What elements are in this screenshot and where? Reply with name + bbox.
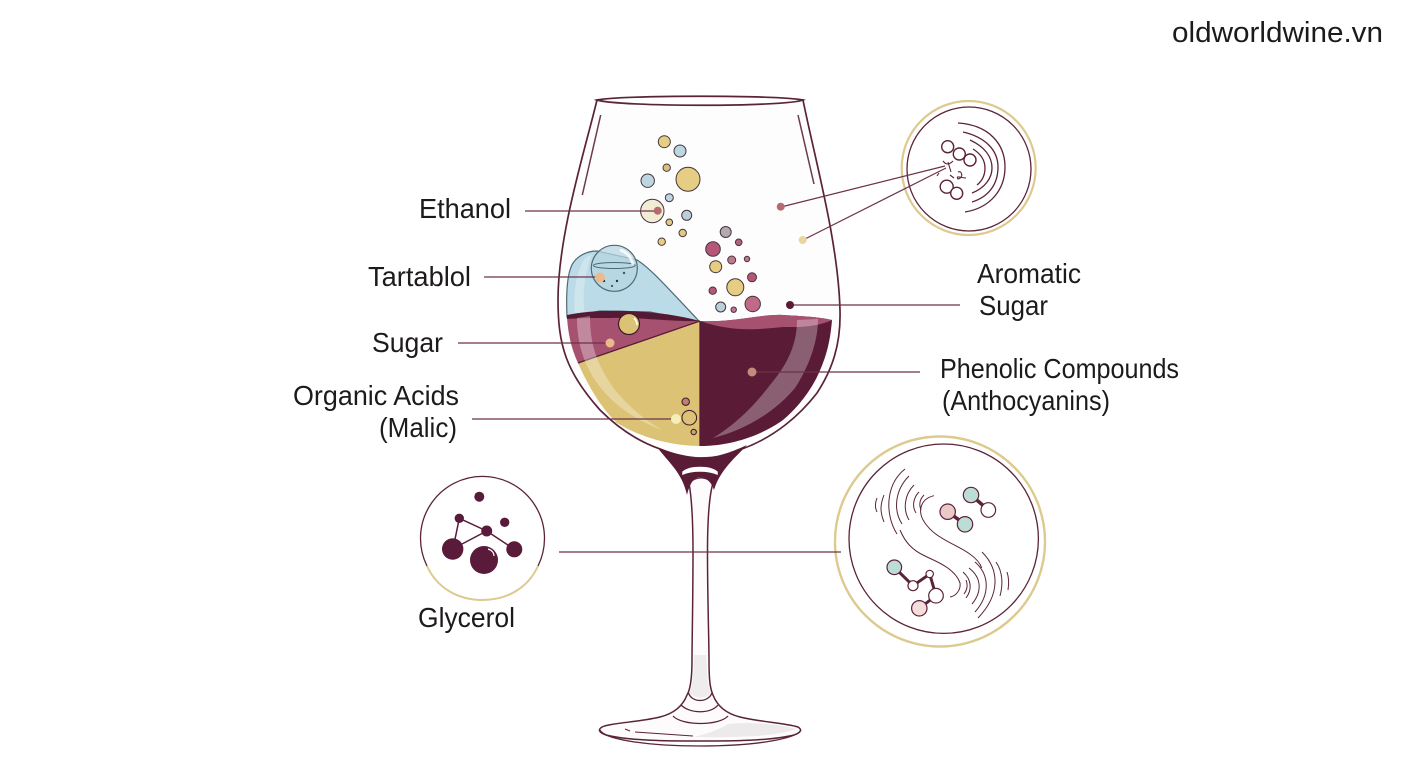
stem and foot — [599, 478, 801, 741]
glass neck — [657, 445, 747, 495]
callout: Phenolic Compounds (Anthocyanins): Phenolic Compounds — [940, 353, 1179, 384]
aroma arcs — [958, 123, 1005, 212]
callout: Phenolic Compounds (Anthocyanins) — [748, 353, 1179, 416]
callout: Ethanol — [419, 193, 662, 224]
stem shading — [690, 655, 711, 698]
callout: Tartablol: Tartablol — [368, 261, 471, 292]
flowing wave lines — [900, 496, 982, 597]
callout: Phenolic Compounds (Anthocyanins): (Anthocyanins) — [942, 385, 1110, 416]
aroma molecule circles — [940, 141, 976, 199]
molecule ring — [835, 436, 1045, 646]
glass rim — [597, 96, 803, 105]
dark wine wedge: phenolic section — [700, 315, 832, 446]
rose wine surface — [700, 315, 832, 329]
callout: Organic Acids (Malic): Organic Acids — [293, 380, 459, 411]
rising bubbles: lower cluster — [706, 226, 760, 312]
callout: Sugar — [372, 327, 614, 358]
right liquid highlight — [713, 319, 818, 438]
callout: Aromatic Sugar: Aromatic — [977, 258, 1081, 289]
yellow wedge: organic acids section — [578, 321, 700, 446]
aroma squiggles — [937, 161, 966, 179]
molecule detail circle — [835, 436, 1045, 646]
glycerol molecule atoms — [442, 492, 522, 574]
foot thickness line — [600, 730, 801, 746]
glass side reflections — [582, 115, 814, 195]
brand site name: oldworldwine.vn — [1172, 17, 1383, 49]
yellow bead on mauve wedge — [618, 314, 640, 334]
aroma pointer lines — [777, 166, 946, 244]
glycerol circle — [420, 476, 544, 600]
blue wedge: tartaric section — [567, 251, 700, 322]
foot reflections — [625, 729, 693, 736]
connector: glycerol to molecule circle — [559, 551, 841, 553]
callout: Ethanol: Ethanol — [419, 193, 511, 224]
stem foot rings — [673, 693, 728, 724]
rising bubbles: upper cluster — [641, 136, 700, 245]
glass bowl outline — [558, 100, 840, 458]
molecule: pink and teal — [940, 504, 973, 532]
callout: Sugar: Sugar — [372, 327, 443, 358]
callout: Organic Acids (Malic): (Malic) — [379, 412, 457, 443]
mauve wedge: sugar section — [567, 311, 700, 363]
aroma ring — [902, 101, 1036, 235]
wedge divider lines — [578, 321, 700, 446]
glass bubble on blue wedge — [591, 245, 637, 291]
aroma detail circle — [902, 101, 1036, 235]
neck highlight — [683, 468, 717, 474]
callout: Aromatic Sugar: Sugar — [979, 290, 1048, 321]
left liquid highlight — [577, 316, 662, 430]
dark band on mauve wedge — [567, 311, 700, 321]
foot highlight — [693, 723, 796, 737]
bubbles inside yellow wedge — [682, 398, 697, 435]
callout: Tartablol — [368, 261, 605, 292]
glycerol ring — [420, 476, 544, 566]
molecule: teal and white — [963, 487, 996, 517]
callout: Aromatic Sugar — [786, 258, 1081, 321]
callout: Organic Acids (Malic) — [293, 380, 681, 443]
blue wedge light streak — [574, 254, 592, 316]
glycerol molecule links — [453, 518, 514, 549]
label: Glycerol: Glycerol — [418, 602, 515, 633]
molecule: chain — [887, 560, 943, 616]
wine glass — [558, 96, 840, 746]
